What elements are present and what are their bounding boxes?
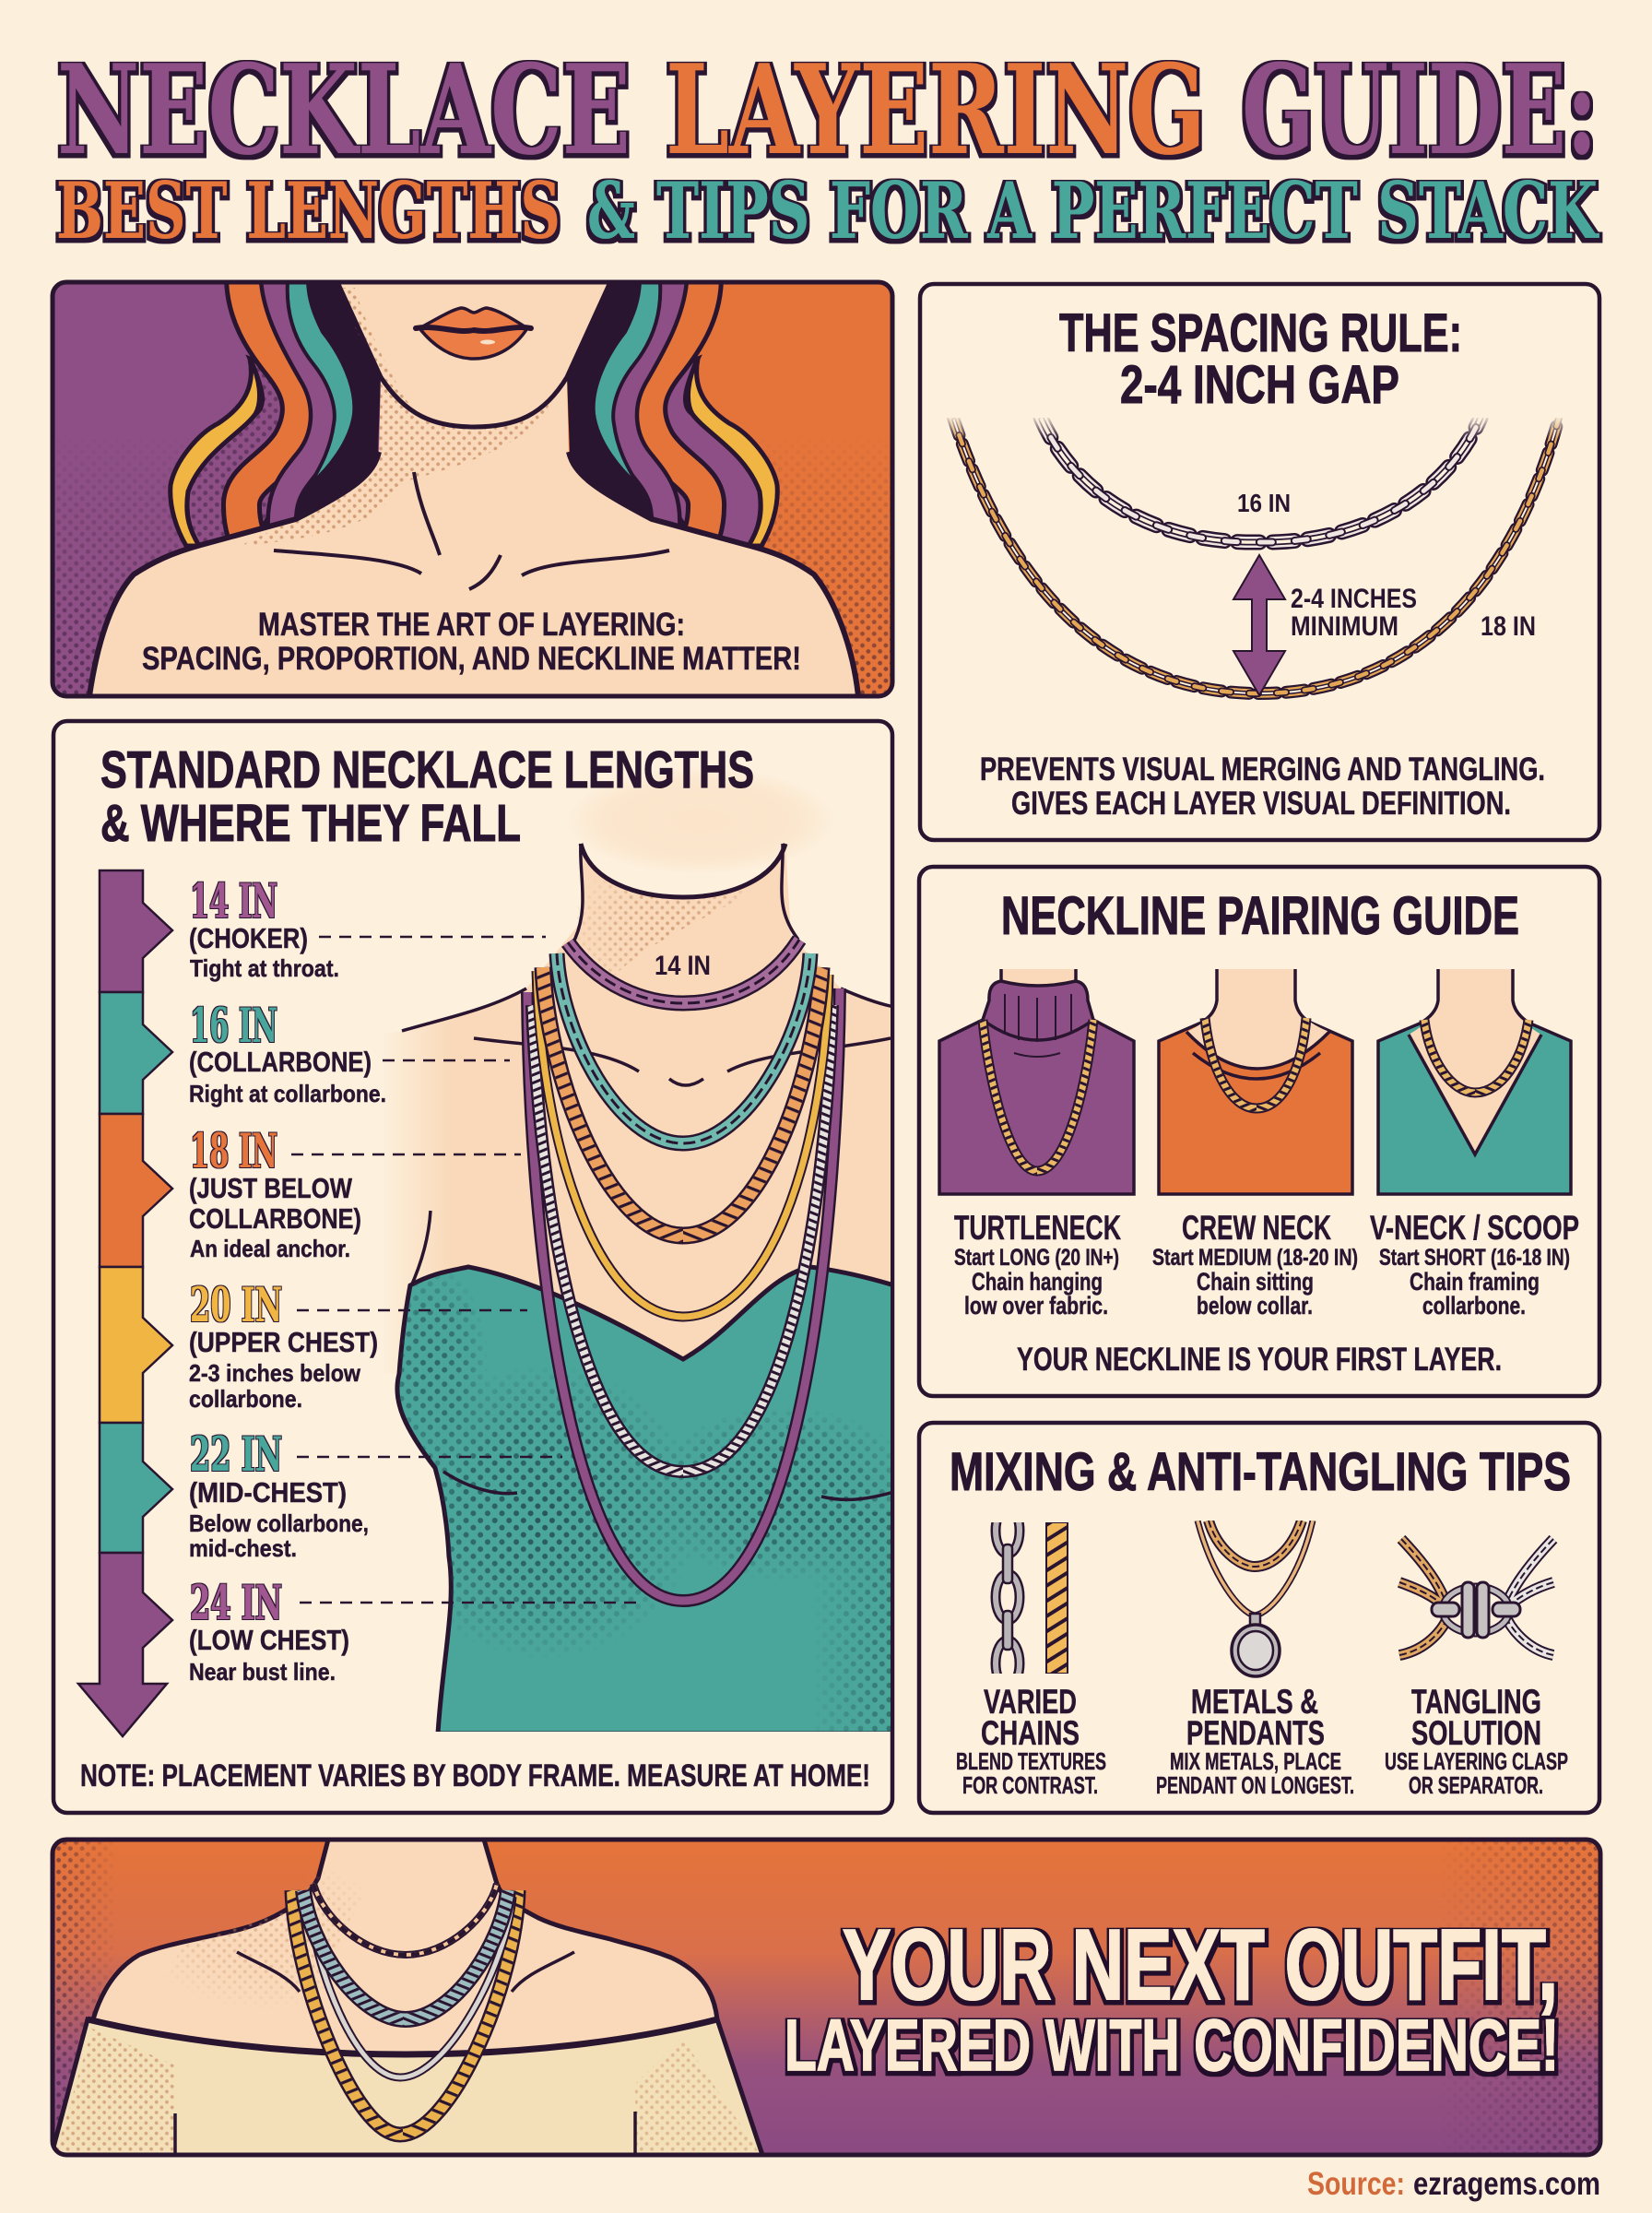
panel: neckline pairing guide xyxy=(919,867,1599,1396)
panel: closing banner xyxy=(51,1840,1600,2158)
length item: 18 in: COLLARBONE) xyxy=(189,1202,361,1235)
spacing heading xyxy=(1059,303,1462,415)
tip: varied chains: BLEND TEXTURES xyxy=(956,1747,1106,1775)
v-neck text: collarbone. xyxy=(1422,1292,1526,1320)
tip: metals and pendants: METALS & xyxy=(1191,1683,1318,1721)
v-neck text: Chain framing xyxy=(1410,1268,1540,1296)
leader lines xyxy=(291,937,644,1603)
length item: 22 in: (MID-CHEST) xyxy=(189,1476,347,1509)
tip: metals and pendants: PENDANTS xyxy=(1186,1714,1325,1752)
panel: hero illustration xyxy=(53,277,892,701)
length item: 18 in: (JUST BELOW xyxy=(189,1172,353,1204)
dress xyxy=(378,1263,922,1734)
tip: varied chains: VARIED xyxy=(984,1683,1077,1721)
note: NOTE: PLACEMENT VARIES BY BODY FRAME. MEASURE AT HOME! xyxy=(80,1758,870,1793)
length item: 16 in xyxy=(189,999,386,1107)
crew neck text: CREW NECK xyxy=(1182,1209,1331,1247)
tip: tangling solution: USE LAYERING CLASP xyxy=(1385,1747,1568,1775)
gap label: MINIMUM xyxy=(1291,611,1398,642)
turtleneck text: TURTLENECK xyxy=(954,1209,1121,1247)
length item: 14 in: (CHOKER) xyxy=(189,922,308,954)
length item: 18 in: An ideal anchor. xyxy=(190,1235,350,1262)
tip: metals and pendants: PENDANT ON LONGEST. xyxy=(1156,1771,1354,1799)
length item: 24 in: Near bust line. xyxy=(189,1658,336,1686)
length item: 14 in: Tight at throat. xyxy=(190,954,339,982)
length item: 20 in: 20 IN xyxy=(190,1278,282,1333)
tip: tangling solution: TANGLING xyxy=(1411,1683,1541,1721)
hero caption: SPACING, PROPORTION, AND NECKLINE MATTER! xyxy=(142,641,801,677)
length item: 22 in: mid-chest. xyxy=(189,1534,297,1562)
icon: lips xyxy=(416,308,531,359)
spacing text xyxy=(980,751,1545,822)
hair right xyxy=(567,277,777,553)
tip: tangling solution xyxy=(1385,1683,1568,1799)
crew neck text xyxy=(1152,1209,1358,1320)
necklace 18 in orange rope xyxy=(543,967,821,1236)
length item: 20 in: 2-3 inches below xyxy=(189,1359,361,1387)
subtitle: BEST LENGTHS xyxy=(56,165,560,256)
turtleneck text: Start LONG (20 IN+) xyxy=(954,1245,1119,1271)
label: 16 in: 16 IN xyxy=(1237,489,1291,517)
length item: 22 in xyxy=(189,1427,369,1562)
length item: 16 in: Right at collarbone. xyxy=(189,1080,386,1107)
tip: varied chains: FOR CONTRAST. xyxy=(962,1771,1098,1799)
arrow: gap xyxy=(1233,555,1285,695)
turtleneck text: Chain hanging xyxy=(972,1268,1103,1296)
length heading: STANDARD NECKLACE LENGTHS xyxy=(100,740,754,799)
label: 14 in on figure: 14 IN xyxy=(655,951,711,981)
subtitle: & xyxy=(587,165,635,256)
tip: metals and pendants: MIX METALS, PLACE xyxy=(1170,1747,1341,1775)
body illustration xyxy=(378,765,922,1734)
necklace 24 in purple xyxy=(527,988,840,1601)
illustration: turtleneck xyxy=(939,969,1134,1194)
tip: metals and pendants xyxy=(1156,1683,1354,1799)
length item: 16 in: (COLLARBONE) xyxy=(189,1046,372,1078)
length item: 22 in: Below collarbone, xyxy=(189,1509,369,1537)
spacing text: GIVES EACH LAYER VISUAL DEFINITION. xyxy=(1011,786,1511,822)
necklace 14 in purple choker xyxy=(568,940,799,1003)
v-neck text: Start SHORT (16-18 IN) xyxy=(1379,1245,1570,1271)
panel: standard necklace lengths xyxy=(53,721,922,1813)
title: NECKLACE xyxy=(57,37,631,183)
chain: gold 18 in xyxy=(953,418,1559,693)
source credit: ezragems.com xyxy=(1413,2166,1600,2202)
tip: varied chains xyxy=(956,1683,1106,1799)
necklace 22 in silver xyxy=(532,1005,832,1472)
hero caption xyxy=(142,607,801,677)
subtitle xyxy=(56,165,1599,256)
illustration: v-neck xyxy=(1378,969,1571,1194)
length item: 14 in: 14 IN xyxy=(190,874,277,929)
icon: silver and gold chains xyxy=(996,1508,1068,1686)
length item: 20 in: (UPPER CHEST) xyxy=(189,1326,378,1358)
crew neck text: Chain sitting xyxy=(1197,1268,1314,1296)
turtleneck text xyxy=(954,1209,1121,1320)
gap label xyxy=(1291,584,1417,642)
length heading: & WHERE THEY FALL xyxy=(100,794,521,853)
necklace 20 in yellow xyxy=(537,971,829,1317)
banner slogan xyxy=(785,1909,1559,2086)
length item: 22 in: 22 IN xyxy=(190,1427,282,1483)
length item: 16 in: 16 IN xyxy=(190,999,277,1054)
title: LAYERING xyxy=(666,37,1206,183)
length item: 24 in: 24 IN xyxy=(190,1576,282,1631)
neckline takeaway: YOUR NECKLINE IS YOUR FIRST LAYER. xyxy=(1017,1342,1502,1378)
icon: layering clasp xyxy=(1399,1539,1553,1655)
length bar arrow xyxy=(78,870,172,1736)
title xyxy=(57,37,1598,183)
crew neck text: below collar. xyxy=(1197,1292,1313,1320)
hero caption: MASTER THE ART OF LAYERING: xyxy=(258,607,685,643)
length item: 14 in xyxy=(189,874,339,982)
panel: the spacing rule xyxy=(920,284,1599,840)
banner necklaces xyxy=(292,1884,518,2135)
panel: mixing and anti-tangling tips xyxy=(919,1423,1599,1813)
source credit: Source: xyxy=(1307,2166,1405,2202)
necklace 16 in teal xyxy=(557,953,810,1143)
gap label: 2-4 INCHES xyxy=(1291,584,1417,614)
length item: 20 in: collarbone. xyxy=(189,1385,302,1413)
hair left xyxy=(171,277,381,553)
spacing heading: THE SPACING RULE: xyxy=(1059,303,1462,363)
chain: silver 16 in xyxy=(1041,418,1481,542)
label: 18 in: 18 IN xyxy=(1481,611,1536,642)
length item: 24 in xyxy=(189,1576,349,1686)
crew neck text: Start MEDIUM (18-20 IN) xyxy=(1152,1245,1358,1271)
v-neck text xyxy=(1370,1209,1579,1320)
length item: 18 in: 18 IN xyxy=(190,1124,277,1179)
icon: pendant necklace xyxy=(1198,1521,1313,1676)
length heading xyxy=(100,740,754,853)
banner figure xyxy=(51,1840,763,2158)
spacing heading: 2-4 INCH GAP xyxy=(1120,355,1399,415)
tip: tangling solution: OR SEPARATOR. xyxy=(1409,1771,1543,1799)
length item: 18 in xyxy=(189,1124,361,1262)
tip: tangling solution: SOLUTION xyxy=(1411,1714,1541,1752)
tip: varied chains: CHAINS xyxy=(981,1714,1080,1752)
v-neck text: V-NECK / SCOOP xyxy=(1370,1209,1579,1247)
length item: 20 in xyxy=(189,1278,378,1413)
illustration: crew neck xyxy=(1159,969,1352,1194)
turtleneck text: low over fabric. xyxy=(964,1292,1108,1320)
source credit xyxy=(1307,2166,1600,2202)
length item: 24 in: (LOW CHEST) xyxy=(189,1624,349,1656)
